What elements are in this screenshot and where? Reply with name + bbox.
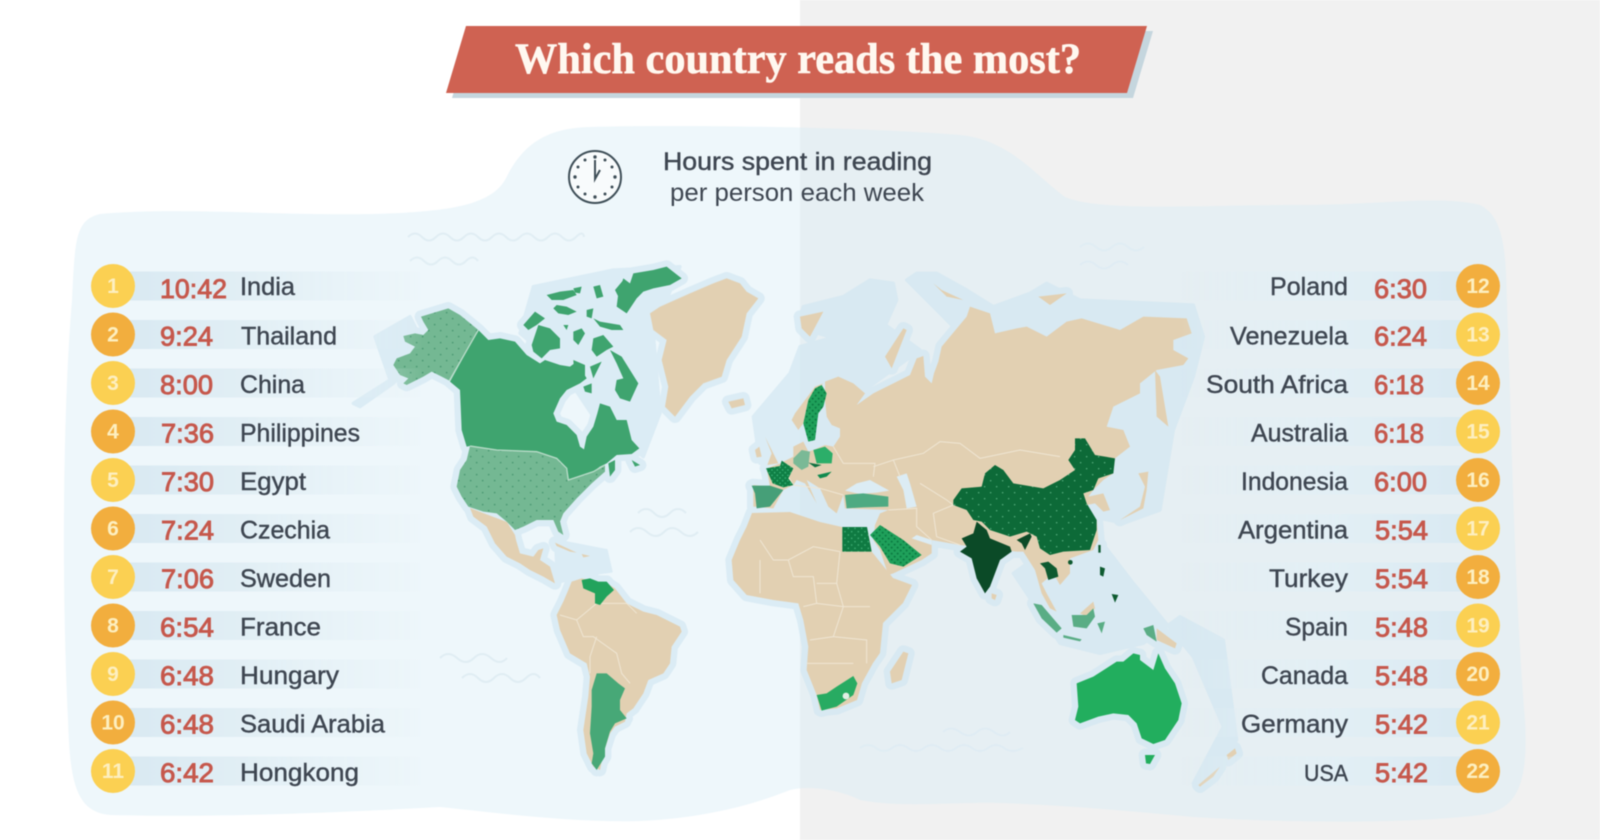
row 4 Philippines: 4 <box>107 420 119 444</box>
country: Argentina <box>590 673 627 770</box>
row 1 India <box>91 264 423 308</box>
row 5 Egypt: 7:30 <box>161 467 214 497</box>
row 7 Sweden: 7:06 <box>161 564 214 594</box>
country: Czechia <box>808 463 822 467</box>
row 19 Spain: 19 <box>1466 614 1490 638</box>
country: Indonesia <box>1033 603 1157 642</box>
country: Turkey <box>845 493 888 508</box>
row 4 Philippines: 7:36 <box>161 418 214 448</box>
country: Poland <box>813 447 833 463</box>
row 22 USA: USA <box>1304 760 1349 786</box>
country: Germany <box>793 450 810 470</box>
row 12 Poland: Poland <box>1270 273 1348 301</box>
row 5 Egypt <box>91 458 423 502</box>
row 14 South Africa: 6:18 <box>1374 370 1424 400</box>
country: Hungary <box>817 472 832 478</box>
row 20 Canada: 20 <box>1466 663 1490 686</box>
country: Thailand <box>1040 562 1058 580</box>
row 9 Hungary: 6:48 <box>160 661 214 691</box>
row 16 Indonesia <box>1180 458 1500 502</box>
row 21 Germany <box>1180 700 1500 744</box>
row 13 Venezuela: Venezuela <box>1230 322 1348 350</box>
row 9 Hungary: 9 <box>107 663 119 686</box>
country: China <box>953 438 1115 555</box>
row 11 Hongkong: 6:42 <box>160 758 214 788</box>
row 11 Hongkong: Hongkong <box>240 759 359 787</box>
panel: pale blue map backdrop <box>64 126 1526 822</box>
row 8 France <box>91 604 423 648</box>
country borders <box>780 442 1060 545</box>
country: USA mainland and Alaska <box>393 308 605 535</box>
row 22 USA: 5:42 <box>1375 758 1428 788</box>
row 1 India: 1 <box>107 275 119 298</box>
row 2 Thailand <box>91 312 423 356</box>
row 5 Egypt: Egypt <box>240 468 306 496</box>
country: South Africa <box>817 676 857 711</box>
row 15 Australia: 15 <box>1466 420 1490 444</box>
country fills: ranked green countries <box>393 267 1182 770</box>
row 16 Indonesia: Indonesia <box>1241 468 1348 496</box>
country: Egypt <box>842 527 872 552</box>
row 4 Philippines: Philippines <box>240 420 360 448</box>
row 7 Sweden: 7 <box>107 566 119 589</box>
title banner <box>446 26 1153 98</box>
row 15 Australia: Australia <box>1251 420 1348 448</box>
row 19 Spain: Spain <box>1285 614 1348 642</box>
row 17 Argentina: 5:54 <box>1375 516 1428 546</box>
row 2 Thailand: Thailand <box>241 322 337 350</box>
row 20 Canada: Canada <box>1261 662 1348 690</box>
row 10 Saudi Arabia: Saudi Arabia <box>240 710 385 738</box>
row 17 Argentina <box>1180 506 1500 550</box>
row 13 Venezuela: 13 <box>1466 324 1490 346</box>
row 1 India: India <box>240 273 295 301</box>
map: world land <box>393 267 1237 787</box>
row 21 Germany: 21 <box>1466 712 1490 734</box>
rank list: left column <box>91 264 423 793</box>
row 8 France: France <box>240 614 321 642</box>
row 8 France: 8 <box>107 614 119 638</box>
row 18 Turkey: 18 <box>1466 566 1490 589</box>
decorative waves <box>408 234 1144 751</box>
row 18 Turkey: Turkey <box>1269 565 1349 593</box>
sea halo around continents <box>353 267 1237 790</box>
row 10 Saudi Arabia: 10 <box>101 712 125 734</box>
row 3 China: China <box>240 371 305 399</box>
country: Venezuela <box>582 578 614 605</box>
row 7 Sweden <box>91 555 423 599</box>
row 13 Venezuela: 6:24 <box>1374 322 1427 352</box>
icon: clock <box>569 151 621 203</box>
country: Australia <box>1075 653 1182 764</box>
inland seas <box>845 473 932 545</box>
row 3 China: 3 <box>107 372 119 395</box>
row 2 Thailand: 9:24 <box>160 322 213 352</box>
background: grey right half <box>800 0 1600 840</box>
row 10 Saudi Arabia: 6:48 <box>160 710 214 740</box>
row 19 Spain: 5:48 <box>1375 612 1428 642</box>
legend heading: hours spent in reading <box>663 148 932 207</box>
legend heading: hours spent in reading: per person each week <box>670 179 925 207</box>
row 15 Australia: 6:18 <box>1374 418 1424 448</box>
Canada / USA border highlight <box>449 330 605 480</box>
country: India <box>960 522 1032 593</box>
row 3 China <box>91 361 423 405</box>
row 6 Czechia: Czechia <box>240 516 330 544</box>
row 1 India: 10:42 <box>160 274 227 304</box>
row 18 Turkey: 5:54 <box>1375 564 1428 594</box>
row 18 Turkey <box>1180 555 1500 599</box>
row 4 Philippines <box>91 410 423 454</box>
row 6 Czechia: 6 <box>107 518 119 540</box>
rank list: right column <box>1180 264 1500 793</box>
background: white left half <box>0 0 800 840</box>
row 11 Hongkong: 11 <box>102 760 124 783</box>
row 20 Canada <box>1180 652 1500 696</box>
row 16 Indonesia: 16 <box>1466 469 1490 492</box>
row 9 Hungary: Hungary <box>240 662 340 690</box>
row 3 China: 8:00 <box>160 370 213 400</box>
country: Spain <box>752 486 783 508</box>
row 17 Argentina: 17 <box>1466 518 1490 540</box>
country: Saudi Arabia <box>870 525 922 567</box>
row 8 France: 6:54 <box>160 612 214 642</box>
row 20 Canada: 5:48 <box>1375 661 1428 691</box>
row 21 Germany: 5:42 <box>1375 710 1428 740</box>
country: Philippines <box>1098 545 1118 603</box>
row 14 South Africa: 14 <box>1466 372 1490 395</box>
row 11 Hongkong <box>91 749 423 793</box>
Lesotho enclave <box>843 693 849 699</box>
row 12 Poland: 6:30 <box>1374 274 1427 304</box>
title: Which country reads the most? <box>515 36 1081 83</box>
row 21 Germany: Germany <box>1241 710 1349 738</box>
country: Sweden <box>803 385 827 442</box>
row 12 Poland: 12 <box>1466 275 1490 298</box>
row 2 Thailand: 2 <box>107 324 119 346</box>
row 17 Argentina: Argentina <box>1238 516 1348 544</box>
row 6 Czechia <box>91 506 423 550</box>
row 10 Saudi Arabia <box>91 700 423 744</box>
row 19 Spain <box>1180 604 1500 648</box>
row 14 South Africa <box>1180 361 1500 405</box>
row 15 Australia <box>1180 410 1500 454</box>
row 22 USA <box>1180 749 1500 793</box>
country: Canada <box>450 267 682 480</box>
legend heading: hours spent in reading: Hours spent in reading <box>663 148 932 176</box>
row 9 Hungary <box>91 652 423 696</box>
country: France <box>766 461 793 487</box>
row 22 USA: 22 <box>1466 760 1490 783</box>
row 7 Sweden: Sweden <box>240 565 331 593</box>
row 14 South Africa: South Africa <box>1206 371 1348 399</box>
hongkong speck <box>1068 560 1073 565</box>
row 6 Czechia: 7:24 <box>161 516 214 546</box>
row 5 Egypt: 5 <box>107 469 119 492</box>
row 12 Poland <box>1180 264 1500 308</box>
row 16 Indonesia: 6:00 <box>1374 467 1427 497</box>
row 13 Venezuela <box>1180 312 1500 356</box>
